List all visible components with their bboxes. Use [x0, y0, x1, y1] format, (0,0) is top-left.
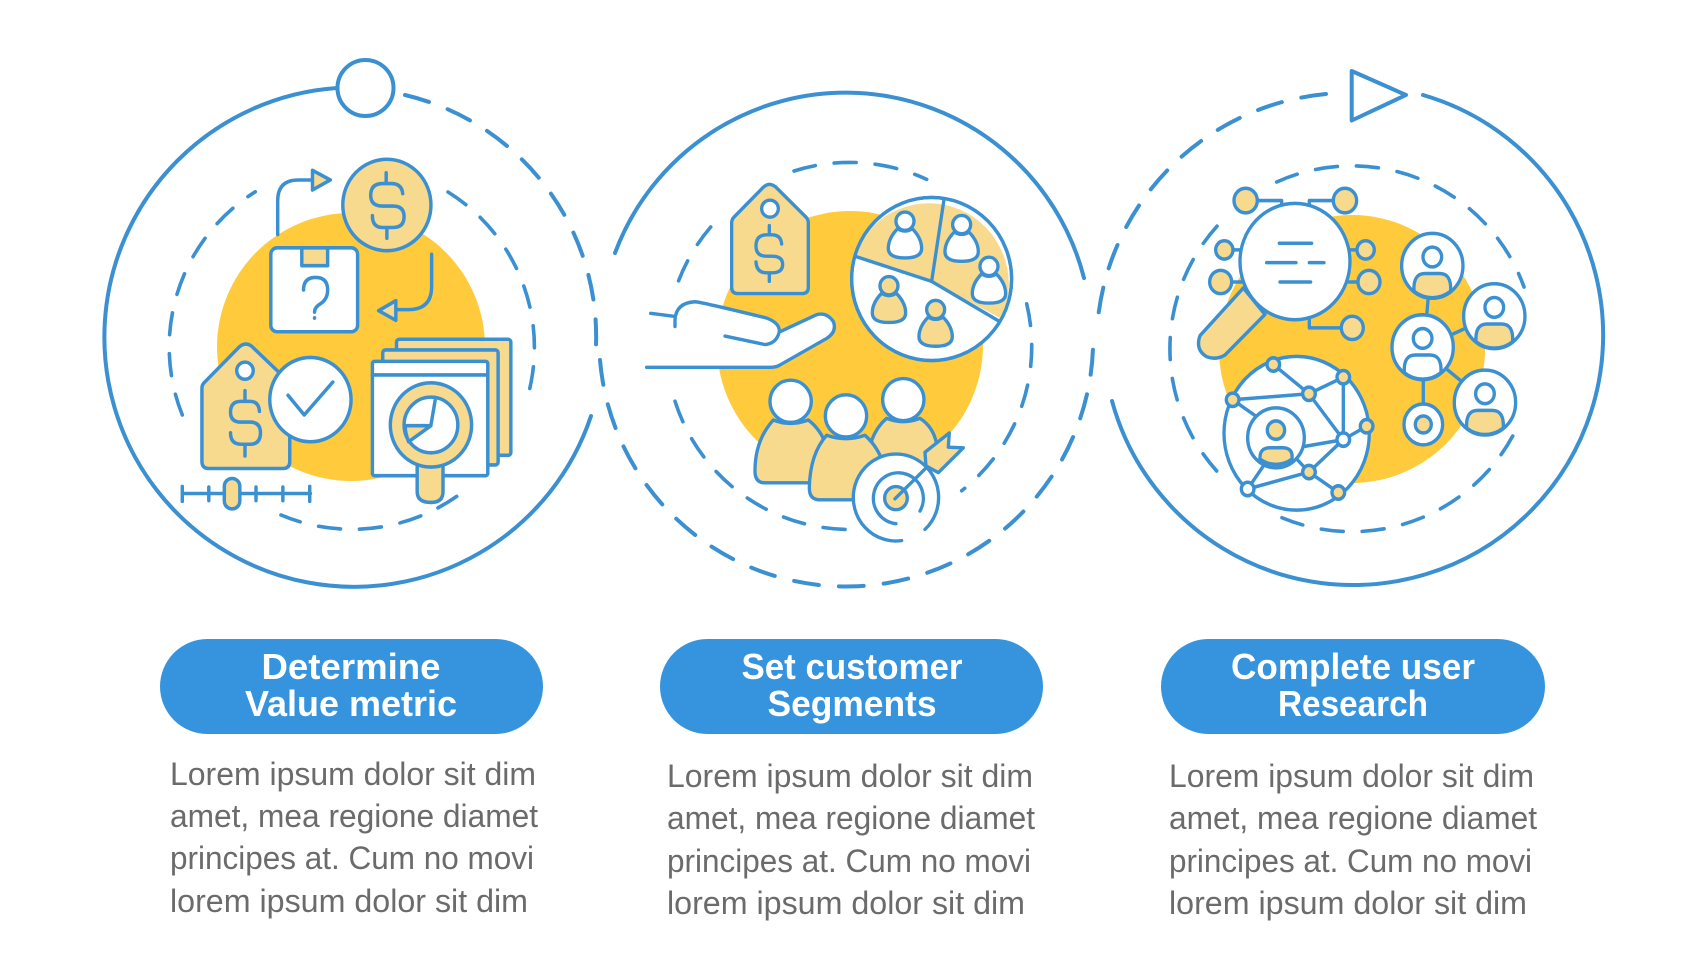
heading pill: determine value metric: [160, 639, 543, 734]
icon: mystery box: [271, 248, 358, 332]
icon: customer segments illustration: [647, 184, 1012, 542]
icon: report pages with magnifier: [372, 339, 511, 502]
text block: determine value metric description: amet, mea regione diamet: [170, 798, 538, 834]
icon: dollar coin: [343, 159, 431, 251]
text block: set customer segments description: lorem ipsum dolor sit dim: [667, 885, 1025, 921]
text block: complete user research description: Lorem ipsum dolor sit dim: [1169, 758, 1534, 794]
text block: determine value metric description: principes at. Cum no movi: [170, 840, 534, 876]
text block: set customer segments description: [667, 758, 1035, 921]
text block: determine value metric description: Lorem ipsum dolor sit dim: [170, 756, 536, 792]
text block: set customer segments description: amet, mea regione diamet: [667, 800, 1035, 836]
outer ring with start marker: [104, 60, 596, 587]
icon: price tag: [732, 184, 808, 294]
panel: complete user research: [1097, 71, 1603, 585]
text block: set customer segments description: Lorem ipsum dolor sit dim: [667, 758, 1033, 794]
heading pill: set customer segments: Set customer: [742, 646, 962, 687]
pie chart of customer segments: [852, 197, 1012, 361]
icon: open hand: [647, 302, 834, 367]
yellow background blob: [1219, 215, 1485, 483]
panel: determine value metric: [104, 60, 596, 587]
text block: set customer segments description: principes at. Cum no movi: [667, 843, 1031, 879]
icon: check mark circle: [270, 357, 351, 442]
inner dashed ring: [672, 162, 1032, 529]
inner dashed ring: [1170, 166, 1524, 532]
icon: target with arrow: [853, 433, 963, 542]
icon: price tag: [202, 344, 290, 469]
icon: up arrow: [278, 170, 330, 235]
panel: set customer segments: [600, 93, 1093, 586]
heading pill: determine value metric: Value metric: [245, 683, 457, 724]
text block: complete user research description: principes at. Cum no movi: [1169, 843, 1532, 879]
yellow background blob: [717, 211, 983, 479]
icon: globe network with user: [1224, 356, 1373, 510]
heading pill: complete user research: Research: [1278, 683, 1428, 724]
heading pill: determine value metric: Determine: [262, 646, 440, 687]
text block: determine value metric description: lorem ipsum dolor sit dim: [170, 883, 528, 919]
icon: group of people: [755, 379, 937, 500]
icon: pricing illustration: [182, 159, 511, 509]
icon: return arrow: [379, 254, 432, 320]
text block: complete user research description: amet, mea regione diamet: [1169, 800, 1537, 836]
heading pill: complete user research: Complete user: [1231, 646, 1475, 687]
inner dashed ring: [169, 192, 534, 529]
icon: magnifier with data nodes: [1198, 188, 1380, 358]
yellow background blob: [217, 213, 485, 481]
icon: slider: [182, 479, 310, 509]
heading pill: set customer segments: [660, 639, 1043, 734]
icon: user research illustration: [1198, 188, 1525, 510]
text block: determine value metric description: [170, 756, 538, 919]
text block: complete user research description: lorem ipsum dolor sit dim: [1169, 885, 1527, 921]
heading pill: set customer segments: Segments: [768, 683, 936, 724]
heading pill: complete user research: [1161, 639, 1545, 734]
outer ring with end arrow: [1097, 71, 1603, 585]
outer ring: [600, 93, 1093, 586]
icon: user network: [1392, 233, 1525, 445]
text block: complete user research description: [1169, 758, 1537, 921]
